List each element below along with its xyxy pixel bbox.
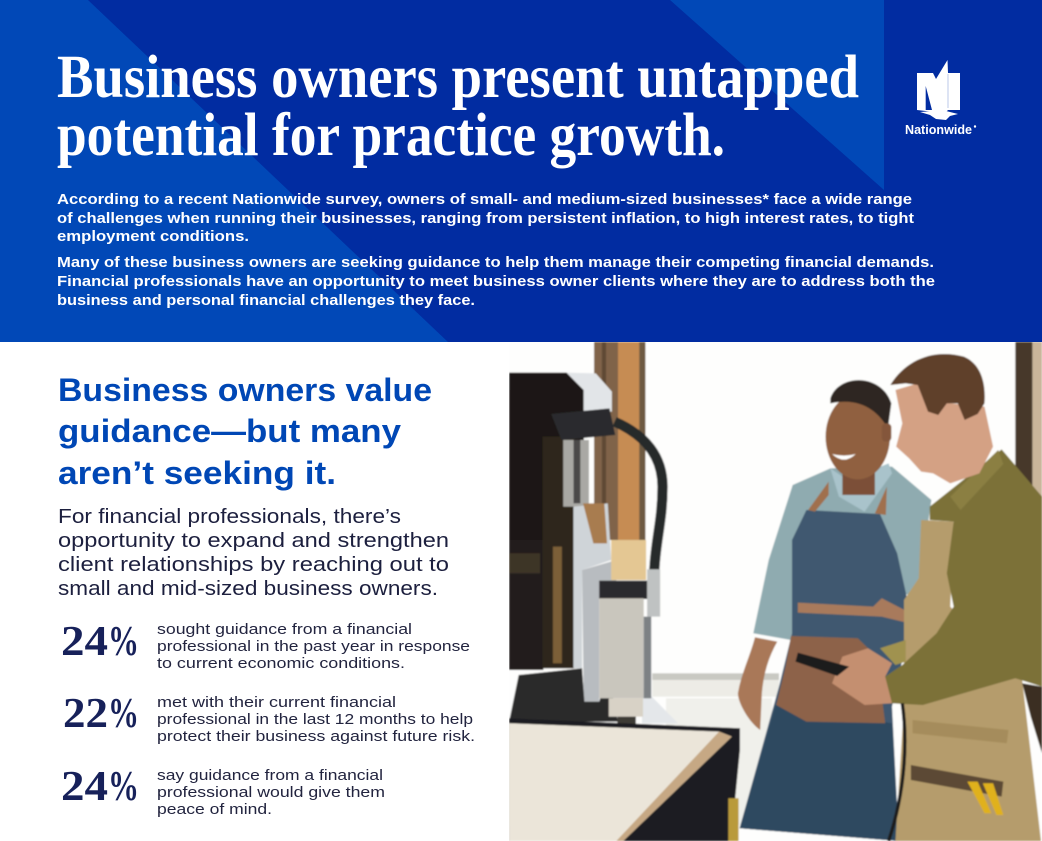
- woman: apron: [740, 510, 907, 841]
- section heading: Business owners value: [58, 372, 432, 408]
- stat: 24% sought guidance: to current economic conditions.: [157, 655, 405, 672]
- section paragraph: small and mid-sized business owners.: [58, 577, 438, 600]
- window frame: [616, 342, 640, 541]
- stat: 22% met with professional: protect their business against future risk.: [157, 728, 475, 745]
- intro paragraph two: Many of these business owners are seeking guidance to help them manage their competing financial demands.: [57, 255, 934, 271]
- stat: 22% met with professional: [63, 691, 475, 745]
- section paragraph: For financial professionals, there’s: [58, 505, 401, 528]
- title: potential for practice growth.: [57, 102, 725, 169]
- section paragraph: opportunity to expand and strengthen: [58, 529, 449, 552]
- stat: 24% sought guidance: [61, 619, 470, 672]
- stat: 24% peace of mind: say guidance from a financial: [157, 767, 383, 784]
- icon: Nationwide logo: [905, 60, 976, 137]
- stat: 22% met with professional: 22: [63, 691, 108, 737]
- intro paragraph one: According to a recent Nationwide survey, owners of small- and medium-sized businesses* face a wide range: [57, 192, 912, 208]
- woman: shirt: [753, 467, 931, 640]
- title: [57, 44, 859, 169]
- machine: [509, 373, 584, 540]
- woman: head and arm: [842, 472, 876, 496]
- stat: 24% peace of mind: %: [108, 764, 139, 810]
- man: apron and shirt: [895, 520, 1041, 841]
- intro paragraph one: of challenges when running their businesses, ranging from persistent inflation, to high interest rates, to tight: [57, 211, 914, 227]
- section heading: guidance—but many: [58, 413, 401, 449]
- stat: 24% sought guidance: sought guidance from a financial: [157, 621, 412, 638]
- stat: 24% sought guidance: 24: [61, 619, 108, 665]
- stat: 22% met with professional: met with their current financial: [157, 694, 396, 711]
- table: [509, 718, 740, 841]
- title: Business owners present untapped: [57, 44, 859, 111]
- stat: 22% met with professional: %: [108, 691, 139, 737]
- stat: 24% peace of mind: 24: [61, 764, 108, 810]
- panel: guidance section: [58, 372, 475, 818]
- intro paragraph two: [57, 255, 935, 309]
- stat: 24% sought guidance: professional in the past year in response: [157, 638, 470, 655]
- section heading: aren’t seeking it.: [58, 455, 336, 491]
- stat: 24% peace of mind: [61, 764, 385, 818]
- photo: two workers at a CNC machine: [509, 342, 1042, 841]
- stat: 24% sought guidance: %: [108, 619, 139, 665]
- section paragraph: [58, 505, 449, 600]
- section paragraph: client relationships by reaching out to: [58, 553, 449, 576]
- intro paragraph two: business and personal financial challenges they face.: [57, 293, 475, 309]
- stat: 24% peace of mind: professional would give them: [157, 784, 385, 801]
- intro paragraph one: employment conditions.: [57, 229, 249, 245]
- man: head: [895, 383, 993, 483]
- stat: 24% peace of mind: peace of mind.: [157, 801, 272, 818]
- section heading: [58, 372, 432, 491]
- intro paragraph two: Financial professionals have an opportunity to meet business owner clients where they are to address both the: [57, 274, 935, 290]
- hands and phone: [832, 648, 892, 705]
- stat: 22% met with professional: professional in the last 12 months to help: [157, 711, 473, 728]
- icon: Nationwide logo: Nationwide: [905, 123, 972, 137]
- intro paragraph one: [57, 192, 914, 245]
- header banner: [0, 0, 1042, 342]
